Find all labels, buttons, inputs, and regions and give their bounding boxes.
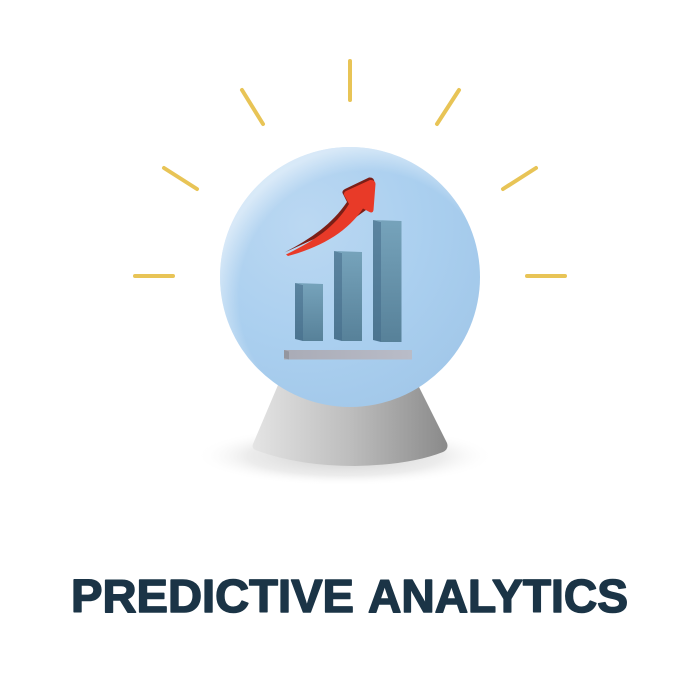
platform (284, 350, 412, 360)
title: ANALYTICS (368, 570, 628, 622)
bar 1 (295, 283, 323, 341)
ground shadow (195, 426, 495, 486)
crystal ball (220, 147, 480, 407)
title: PREDICTIVE (71, 570, 354, 622)
stand (253, 385, 448, 466)
bar 2 (334, 251, 362, 341)
trend arrow (284, 177, 376, 256)
bar 3 (373, 220, 402, 342)
title (71, 570, 628, 622)
bar chart (295, 220, 402, 342)
light rays (135, 61, 565, 276)
